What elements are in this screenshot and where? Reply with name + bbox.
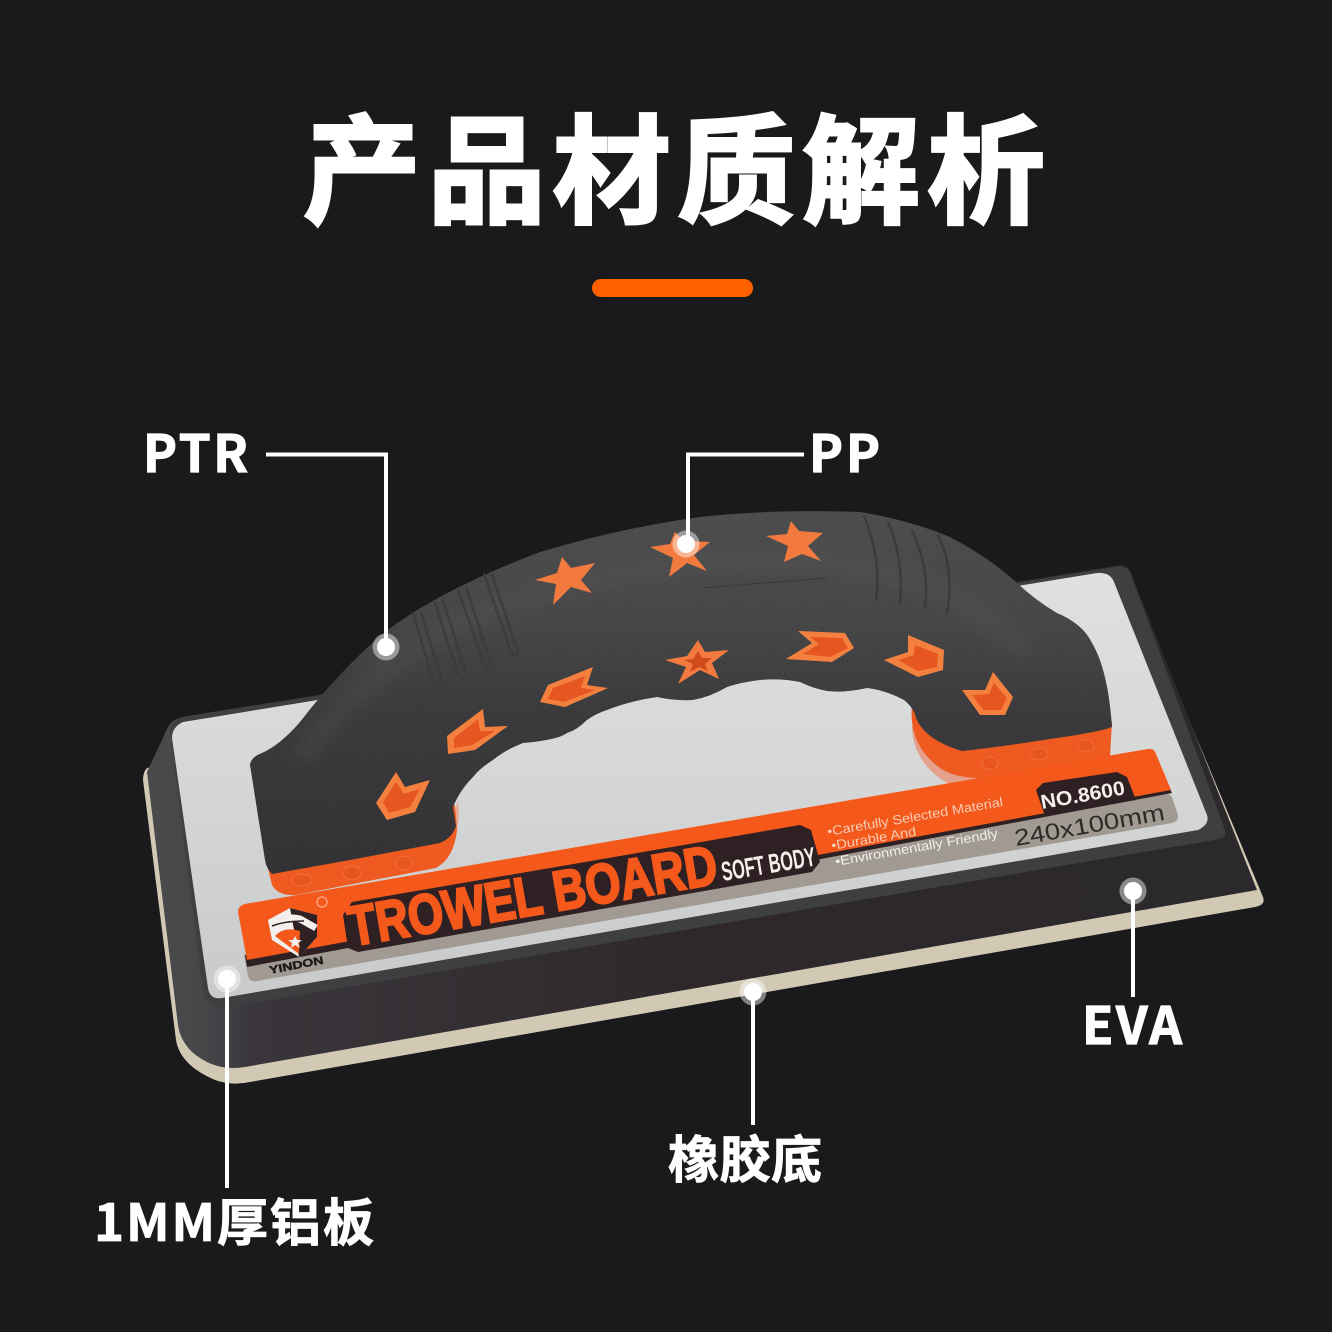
leader line: PTR <box>266 454 386 647</box>
handle chevrons <box>376 631 1013 820</box>
star 2 <box>650 532 710 577</box>
rubber base body <box>147 565 1257 1068</box>
label: aluminium plate: 1MM厚铝板 <box>94 1182 374 1256</box>
star 1 <box>535 557 595 605</box>
star 4 <box>665 640 729 684</box>
text: brand: YINDON <box>268 955 325 977</box>
trowel product illustration <box>143 511 1264 1084</box>
text: TROWEL BOARD: TROWEL BOARD <box>343 833 722 958</box>
callout: aluminium plate <box>94 966 374 1256</box>
marker: rubber base <box>740 978 766 1006</box>
callout: EVA <box>1082 878 1182 1059</box>
marker: aluminium plate <box>214 966 240 992</box>
chevron 2 <box>447 709 508 754</box>
label: PTR: PTR <box>143 413 248 487</box>
foot reflections <box>440 725 1010 870</box>
model badge <box>1036 772 1136 816</box>
handle rubber grain <box>250 511 1112 874</box>
star 3 <box>766 521 823 562</box>
right grip ridges <box>864 516 950 613</box>
foot dimples <box>292 740 1094 886</box>
leader line: EVA <box>1131 891 1135 997</box>
text: model number: NO.8600 <box>1039 777 1127 814</box>
plate rim <box>170 566 1225 1008</box>
chevron 6 <box>962 672 1013 715</box>
marker: PP <box>672 530 700 558</box>
name badge <box>343 825 820 952</box>
left grip ridges <box>413 572 518 693</box>
marker: EVA <box>1120 878 1146 904</box>
leader line: aluminium plate <box>225 979 229 1188</box>
chevron 5 <box>884 635 944 677</box>
handle grip <box>250 511 1112 874</box>
text: feature line 1: •Carefully Selected Material <box>826 794 1004 839</box>
handle stars <box>535 521 823 684</box>
text: SOFT BODY: SOFT BODY <box>719 842 818 887</box>
text: size: 240x100mm <box>1012 799 1167 851</box>
aluminium plate <box>172 573 1208 998</box>
title: 产品材质解析 <box>303 77 1045 248</box>
title accent bar <box>592 279 753 297</box>
chevron 4 <box>786 631 854 662</box>
label: EVA: EVA <box>1082 985 1182 1059</box>
chevron 3 <box>540 667 608 707</box>
leader line: rubber base <box>751 992 755 1125</box>
handle highlight <box>300 560 1030 760</box>
leader line: PP <box>688 454 804 544</box>
right orange foot <box>912 705 1112 778</box>
callout: rubber base <box>668 978 822 1193</box>
label: rubber base: 橡胶底 <box>668 1119 822 1193</box>
callout: PTR <box>143 413 400 660</box>
label orange strip <box>238 749 1171 960</box>
handle seam <box>703 578 827 588</box>
label dark band <box>245 785 1172 967</box>
chevron 1 <box>376 772 430 820</box>
text: feature line 3: •Environmentally Friendly <box>834 825 1000 869</box>
callout: PP <box>672 413 880 558</box>
EVA cream layer <box>143 578 1264 1084</box>
product label <box>238 749 1178 981</box>
left orange foot <box>266 805 457 895</box>
brand logo shield <box>268 897 327 957</box>
marker: PTR <box>372 634 400 660</box>
label: PP: PP <box>809 413 880 487</box>
text: feature line 2: •Durable And <box>830 824 917 853</box>
label grey strip <box>244 790 1178 981</box>
